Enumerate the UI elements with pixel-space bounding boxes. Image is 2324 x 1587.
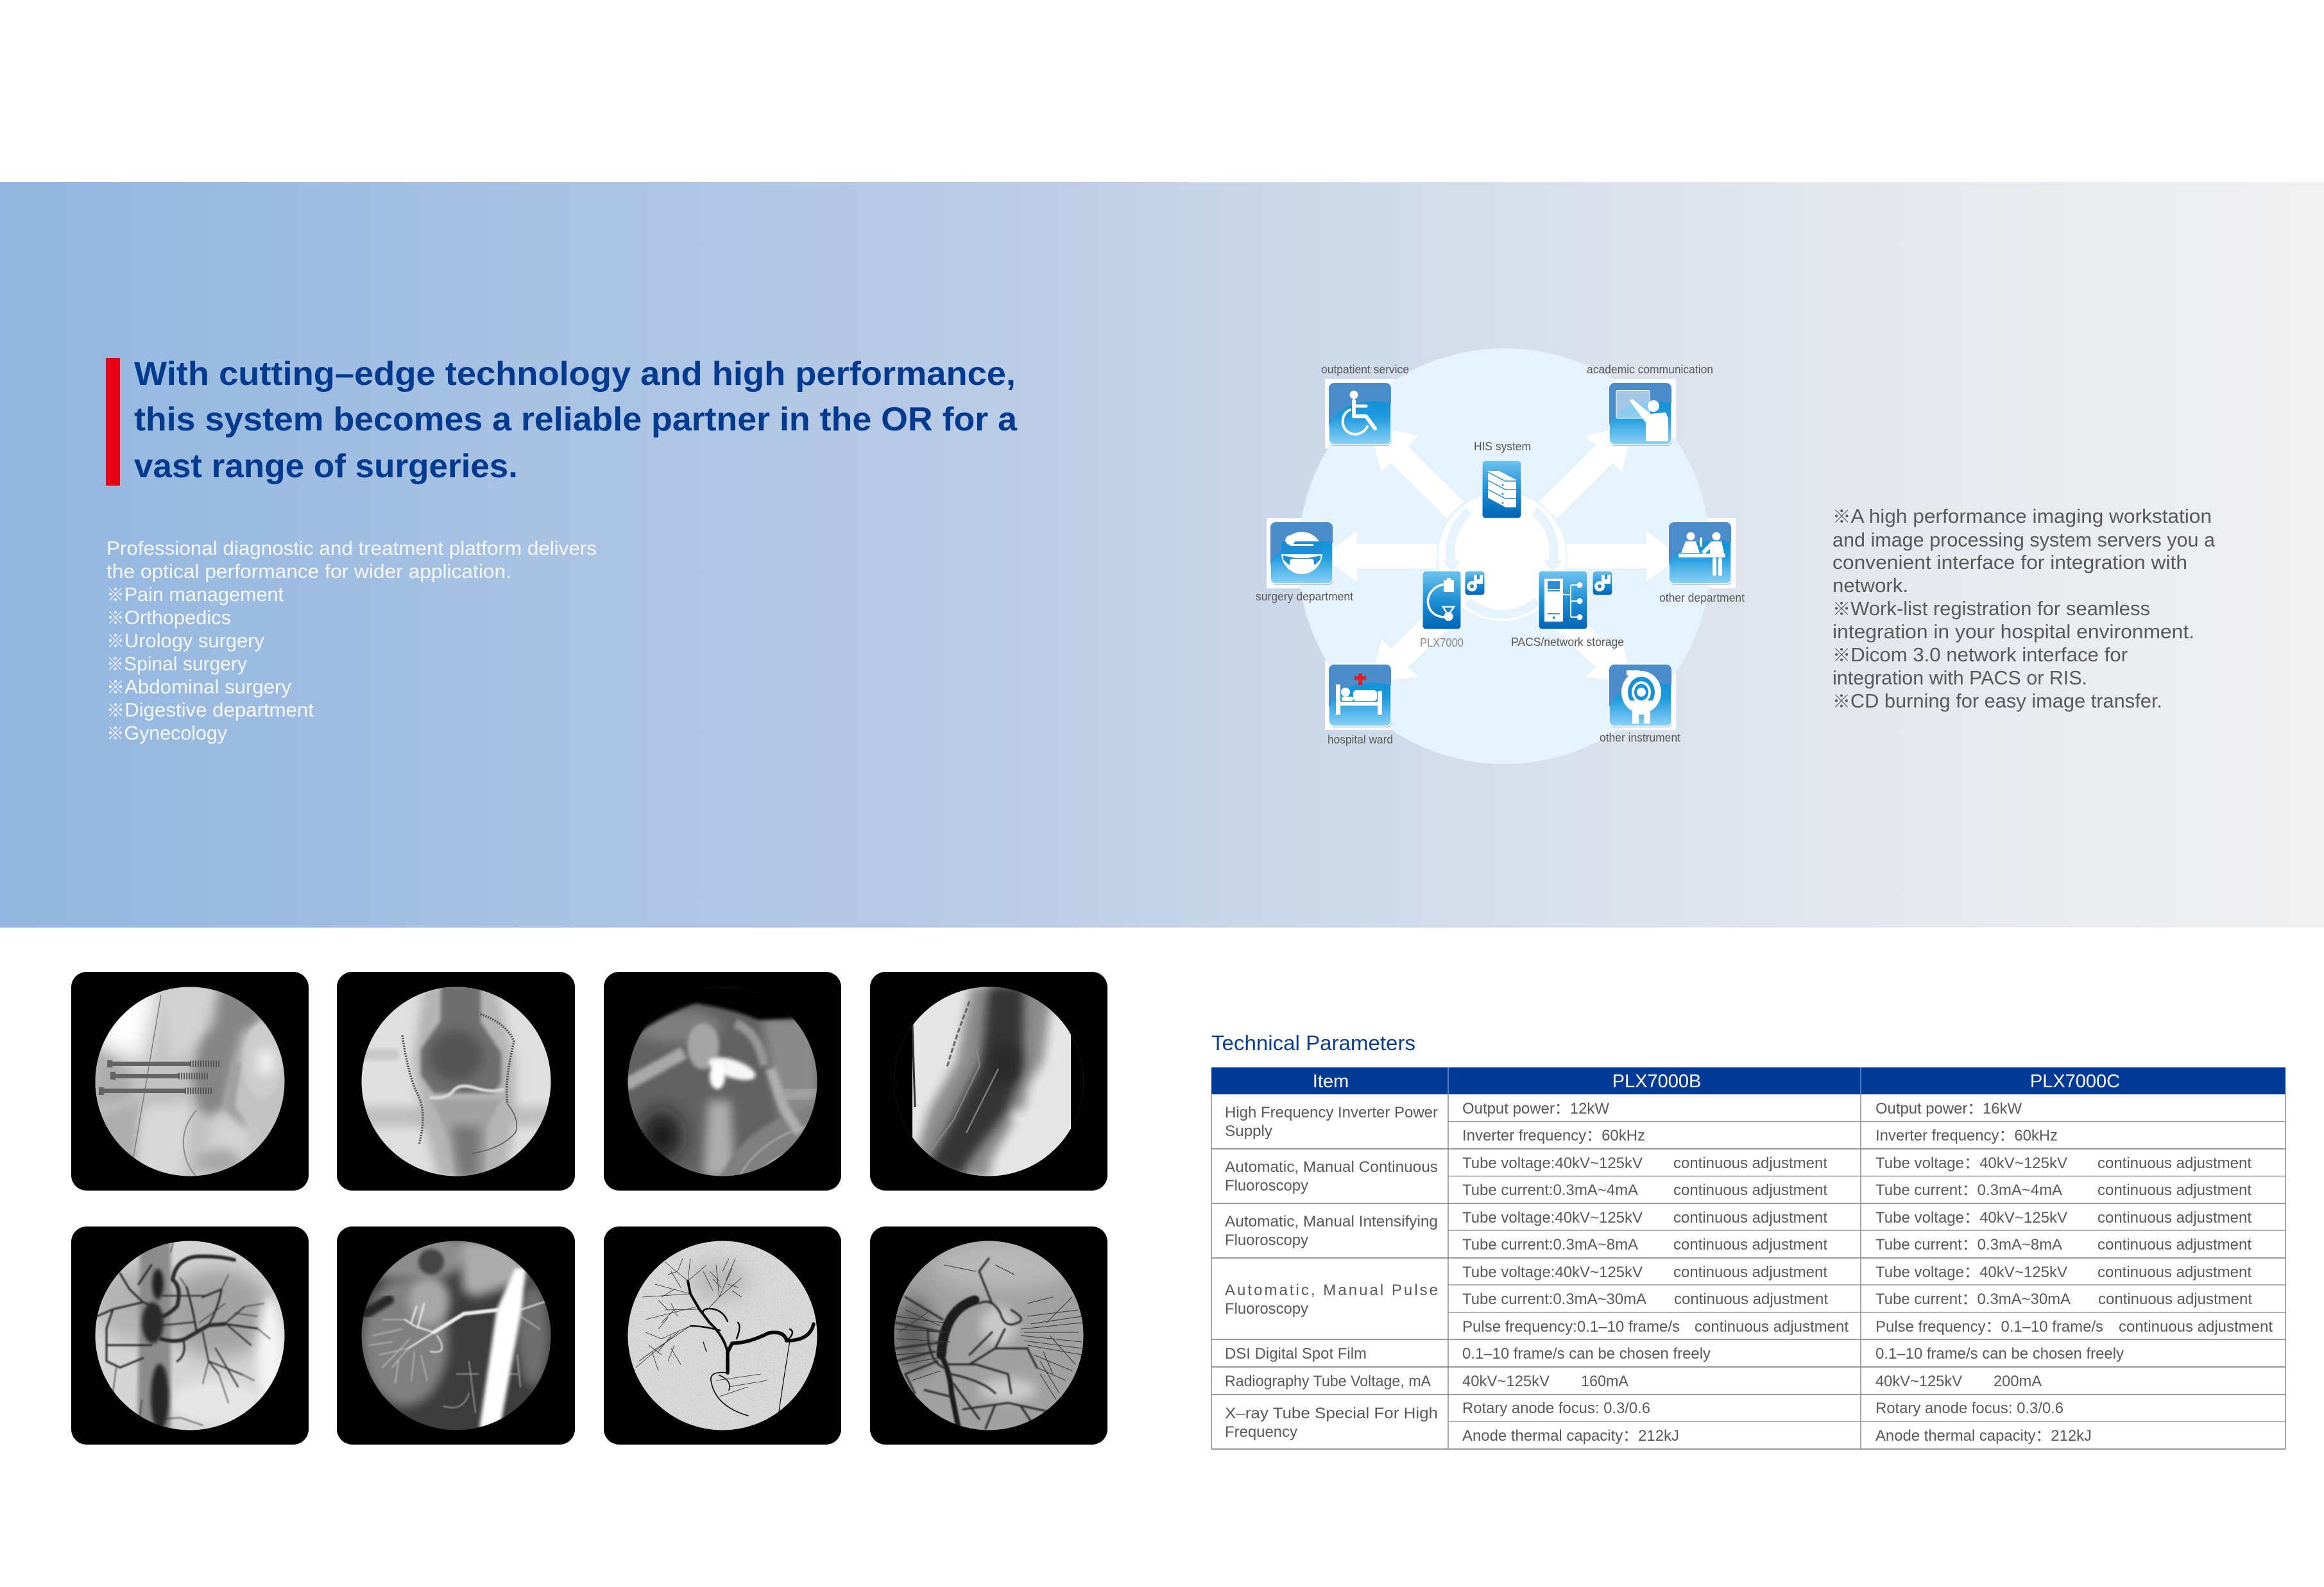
title: this system becomes a reliable partner in the OR for a xyxy=(134,401,1018,438)
text block: applications list: ※Abdominal surgery xyxy=(107,675,291,698)
text block: network features: ※A high performance imaging workstation xyxy=(1833,505,2212,527)
PLX7000C column: 0.1–10 frame/s can be chosen freely xyxy=(1875,1345,2124,1362)
central hub ring xyxy=(1438,493,1566,621)
title xyxy=(134,355,1018,485)
table header: Item xyxy=(1313,1071,1349,1092)
diagram labels: PLX7000 xyxy=(1420,636,1464,649)
PLX7000B column: Tube current:0.3mA~8mA xyxy=(1462,1236,1638,1253)
panel: x-ray shoulder xyxy=(604,972,841,1191)
PLX7000C column: Inverter frequency：60kHz xyxy=(1875,1127,2058,1144)
item column: X–ray Tube Special For High xyxy=(1225,1405,1438,1422)
PLX7000B column: continuous adjustment xyxy=(1673,1236,1827,1253)
icon: PACS network storage xyxy=(1539,571,1587,629)
table: technical parameters xyxy=(1211,1067,2286,1449)
panel: angiogram renal dark vessels xyxy=(71,1226,309,1445)
diagram background circle xyxy=(1298,348,1711,764)
text block: network features: integration with PACS or RIS. xyxy=(1833,666,2087,689)
PLX7000B column: continuous adjustment xyxy=(1673,1209,1827,1226)
PLX7000B column: Tube voltage:40kV~125kV xyxy=(1462,1155,1643,1172)
text block: applications list xyxy=(107,537,597,744)
item column: Fluoroscopy xyxy=(1225,1300,1308,1318)
PLX7000C column: Anode thermal capacity：212kJ xyxy=(1875,1427,2092,1445)
item column: Fluoroscopy xyxy=(1225,1177,1308,1194)
item column: Automatic, Manual Continuous xyxy=(1225,1158,1438,1176)
diagram labels: PACS/network storage xyxy=(1511,636,1624,649)
PLX7000B column: continuous adjustment xyxy=(1673,1182,1827,1199)
diagram labels: outpatient service xyxy=(1321,363,1409,376)
item column: Supply xyxy=(1225,1123,1272,1140)
text block: network features: ※Work-list registration for seamless xyxy=(1833,597,2150,620)
PLX7000B column: continuous adjustment xyxy=(1673,1155,1827,1172)
text block: network features: ※Dicom 3.0 network interface for xyxy=(1833,643,2128,666)
panel: angiogram kidney bright vessels xyxy=(337,1226,575,1445)
accent bar xyxy=(106,358,120,486)
text block: applications list: the optical performance for wider application. xyxy=(107,560,511,582)
connection arrows xyxy=(1322,425,1681,683)
PLX7000C column: Output power：16kW xyxy=(1875,1100,2022,1117)
PLX7000B column: Tube current:0.3mA~30mA xyxy=(1462,1291,1646,1308)
diagram labels: other department xyxy=(1659,591,1745,604)
text block: applications list: ※Spinal surgery xyxy=(107,652,247,675)
panel: angiogram hepatic artery xyxy=(604,1226,841,1445)
PLX7000B column: 160mA xyxy=(1581,1373,1628,1390)
icon: academic communication xyxy=(1609,383,1672,446)
text block: network features xyxy=(1833,505,2216,712)
diagram labels: other instrument xyxy=(1600,731,1680,744)
panel: gradient banner xyxy=(0,182,2324,928)
panel: angiogram dense vessels xyxy=(870,1226,1107,1445)
diagram labels xyxy=(1256,363,1745,746)
PLX7000C column: continuous adjustment xyxy=(2098,1182,2251,1199)
PLX7000B column: Rotary anode focus: 0.3/0.6 xyxy=(1462,1400,1650,1417)
text block: network features: integration in your hospital environment. xyxy=(1833,620,2194,643)
PLX7000B column: Output power：12kW xyxy=(1462,1100,1609,1117)
PLX7000B column: Tube current:0.3mA~4mA xyxy=(1462,1182,1638,1199)
PLX7000C column: Tube current：0.3mA~30mA xyxy=(1875,1291,2071,1308)
panel: x-ray hip with screws xyxy=(71,972,309,1191)
table header: PLX7000C xyxy=(2030,1071,2120,1092)
PLX7000B column: Tube voltage:40kV~125kV xyxy=(1462,1264,1643,1281)
panel: x-ray elbow xyxy=(870,972,1107,1191)
PLX7000B column xyxy=(1462,1100,1849,1445)
panel: x-ray knee with sutures xyxy=(337,972,575,1191)
PLX7000B column: continuous adjustment xyxy=(1695,1318,1849,1336)
text block: network features: and image processing system servers you a xyxy=(1833,529,2216,551)
PLX7000B column: 0.1–10 frame/s can be chosen freely xyxy=(1462,1345,1711,1362)
PLX7000C column: Rotary anode focus: 0.3/0.6 xyxy=(1875,1400,2063,1417)
PLX7000C column: continuous adjustment xyxy=(2098,1155,2251,1172)
item column: High Frequency Inverter Power xyxy=(1225,1104,1438,1121)
PLX7000B column: continuous adjustment xyxy=(1673,1264,1827,1281)
PLX7000C column: Tube current：0.3mA~4mA xyxy=(1875,1182,2062,1199)
diagram labels: HIS system xyxy=(1474,440,1531,453)
text block: applications list: ※Gynecology xyxy=(107,722,227,744)
text block: network features: convenient interface for integration with xyxy=(1833,551,2187,573)
title: With cutting–edge technology and high performance, xyxy=(134,355,1016,393)
PLX7000C column: Tube voltage：40kV~125kV xyxy=(1875,1155,2067,1172)
text block: applications list: Professional diagnostic and treatment platform delivers xyxy=(107,537,597,559)
item column: Automatic, Manual Pulse xyxy=(1225,1282,1438,1299)
PLX7000B column: Inverter frequency：60kHz xyxy=(1462,1127,1645,1144)
PLX7000C column: continuous adjustment xyxy=(2119,1318,2273,1336)
PLX7000C column xyxy=(1875,1100,2273,1445)
icon: other instrument xyxy=(1609,665,1672,727)
PLX7000B column: Pulse frequency:0.1–10 frame/s xyxy=(1462,1318,1680,1336)
item column: Frequency xyxy=(1225,1423,1297,1441)
text block: network features: network. xyxy=(1833,574,1908,597)
PLX7000C column: 200mA xyxy=(1994,1373,2042,1390)
text block: applications list: ※Urology surgery xyxy=(107,629,264,652)
PLX7000C column: continuous adjustment xyxy=(2098,1264,2251,1281)
PLX7000C column: continuous adjustment xyxy=(2098,1236,2251,1253)
PLX7000B column: Tube voltage:40kV~125kV xyxy=(1462,1209,1643,1226)
network diagram xyxy=(1256,348,1745,764)
item column: Radiography Tube Voltage, mA xyxy=(1225,1373,1431,1390)
text block: applications list: ※Orthopedics xyxy=(107,606,231,629)
icon: other department xyxy=(1669,522,1732,585)
PLX7000C column: continuous adjustment xyxy=(2098,1291,2252,1308)
icon: HIS system xyxy=(1482,461,1521,518)
PLX7000B column: Anode thermal capacity：212kJ xyxy=(1462,1427,1679,1445)
diagram labels: academic communication xyxy=(1587,363,1713,376)
item column: Automatic, Manual Intensifying xyxy=(1225,1213,1438,1230)
title: vast range of surgeries. xyxy=(134,448,518,485)
PLX7000C column: Tube current：0.3mA~8mA xyxy=(1875,1236,2062,1253)
icon: PACS storage disc xyxy=(1593,571,1612,595)
PLX7000C column: continuous adjustment xyxy=(2098,1209,2251,1226)
icon: outpatient service xyxy=(1329,383,1392,446)
icon: PLX storage disc xyxy=(1465,571,1485,595)
table header: PLX7000B xyxy=(1612,1071,1701,1092)
text block: applications list: ※Pain management xyxy=(107,583,284,606)
item column xyxy=(1225,1104,1438,1441)
icon backing squares xyxy=(1267,379,1736,730)
item column: Fluoroscopy xyxy=(1225,1232,1308,1249)
PLX7000B column: 40kV~125kV xyxy=(1462,1373,1550,1390)
PLX7000C column: Tube voltage：40kV~125kV xyxy=(1875,1264,2067,1281)
icon: PLX7000 C-arm xyxy=(1423,571,1461,629)
text block: applications list: ※Digestive department xyxy=(107,699,314,721)
PLX7000C column: Tube voltage：40kV~125kV xyxy=(1875,1209,2067,1226)
PLX7000C column: 40kV~125kV xyxy=(1875,1373,1962,1390)
diagram labels: hospital ward xyxy=(1328,733,1393,746)
icon: hospital ward xyxy=(1329,665,1392,727)
icon: surgery department xyxy=(1270,522,1333,585)
table header xyxy=(1211,1067,2286,1094)
heading: technical parameters: Technical Parameters xyxy=(1211,1031,1415,1055)
text block: network features: ※CD burning for easy image transfer. xyxy=(1833,690,2162,712)
PLX7000C column: Pulse frequency：0.1–10 frame/s xyxy=(1875,1318,2103,1336)
diagram labels: surgery department xyxy=(1256,590,1353,603)
PLX7000B column: continuous adjustment xyxy=(1674,1291,1828,1308)
item column: DSI Digital Spot Film xyxy=(1225,1345,1367,1362)
